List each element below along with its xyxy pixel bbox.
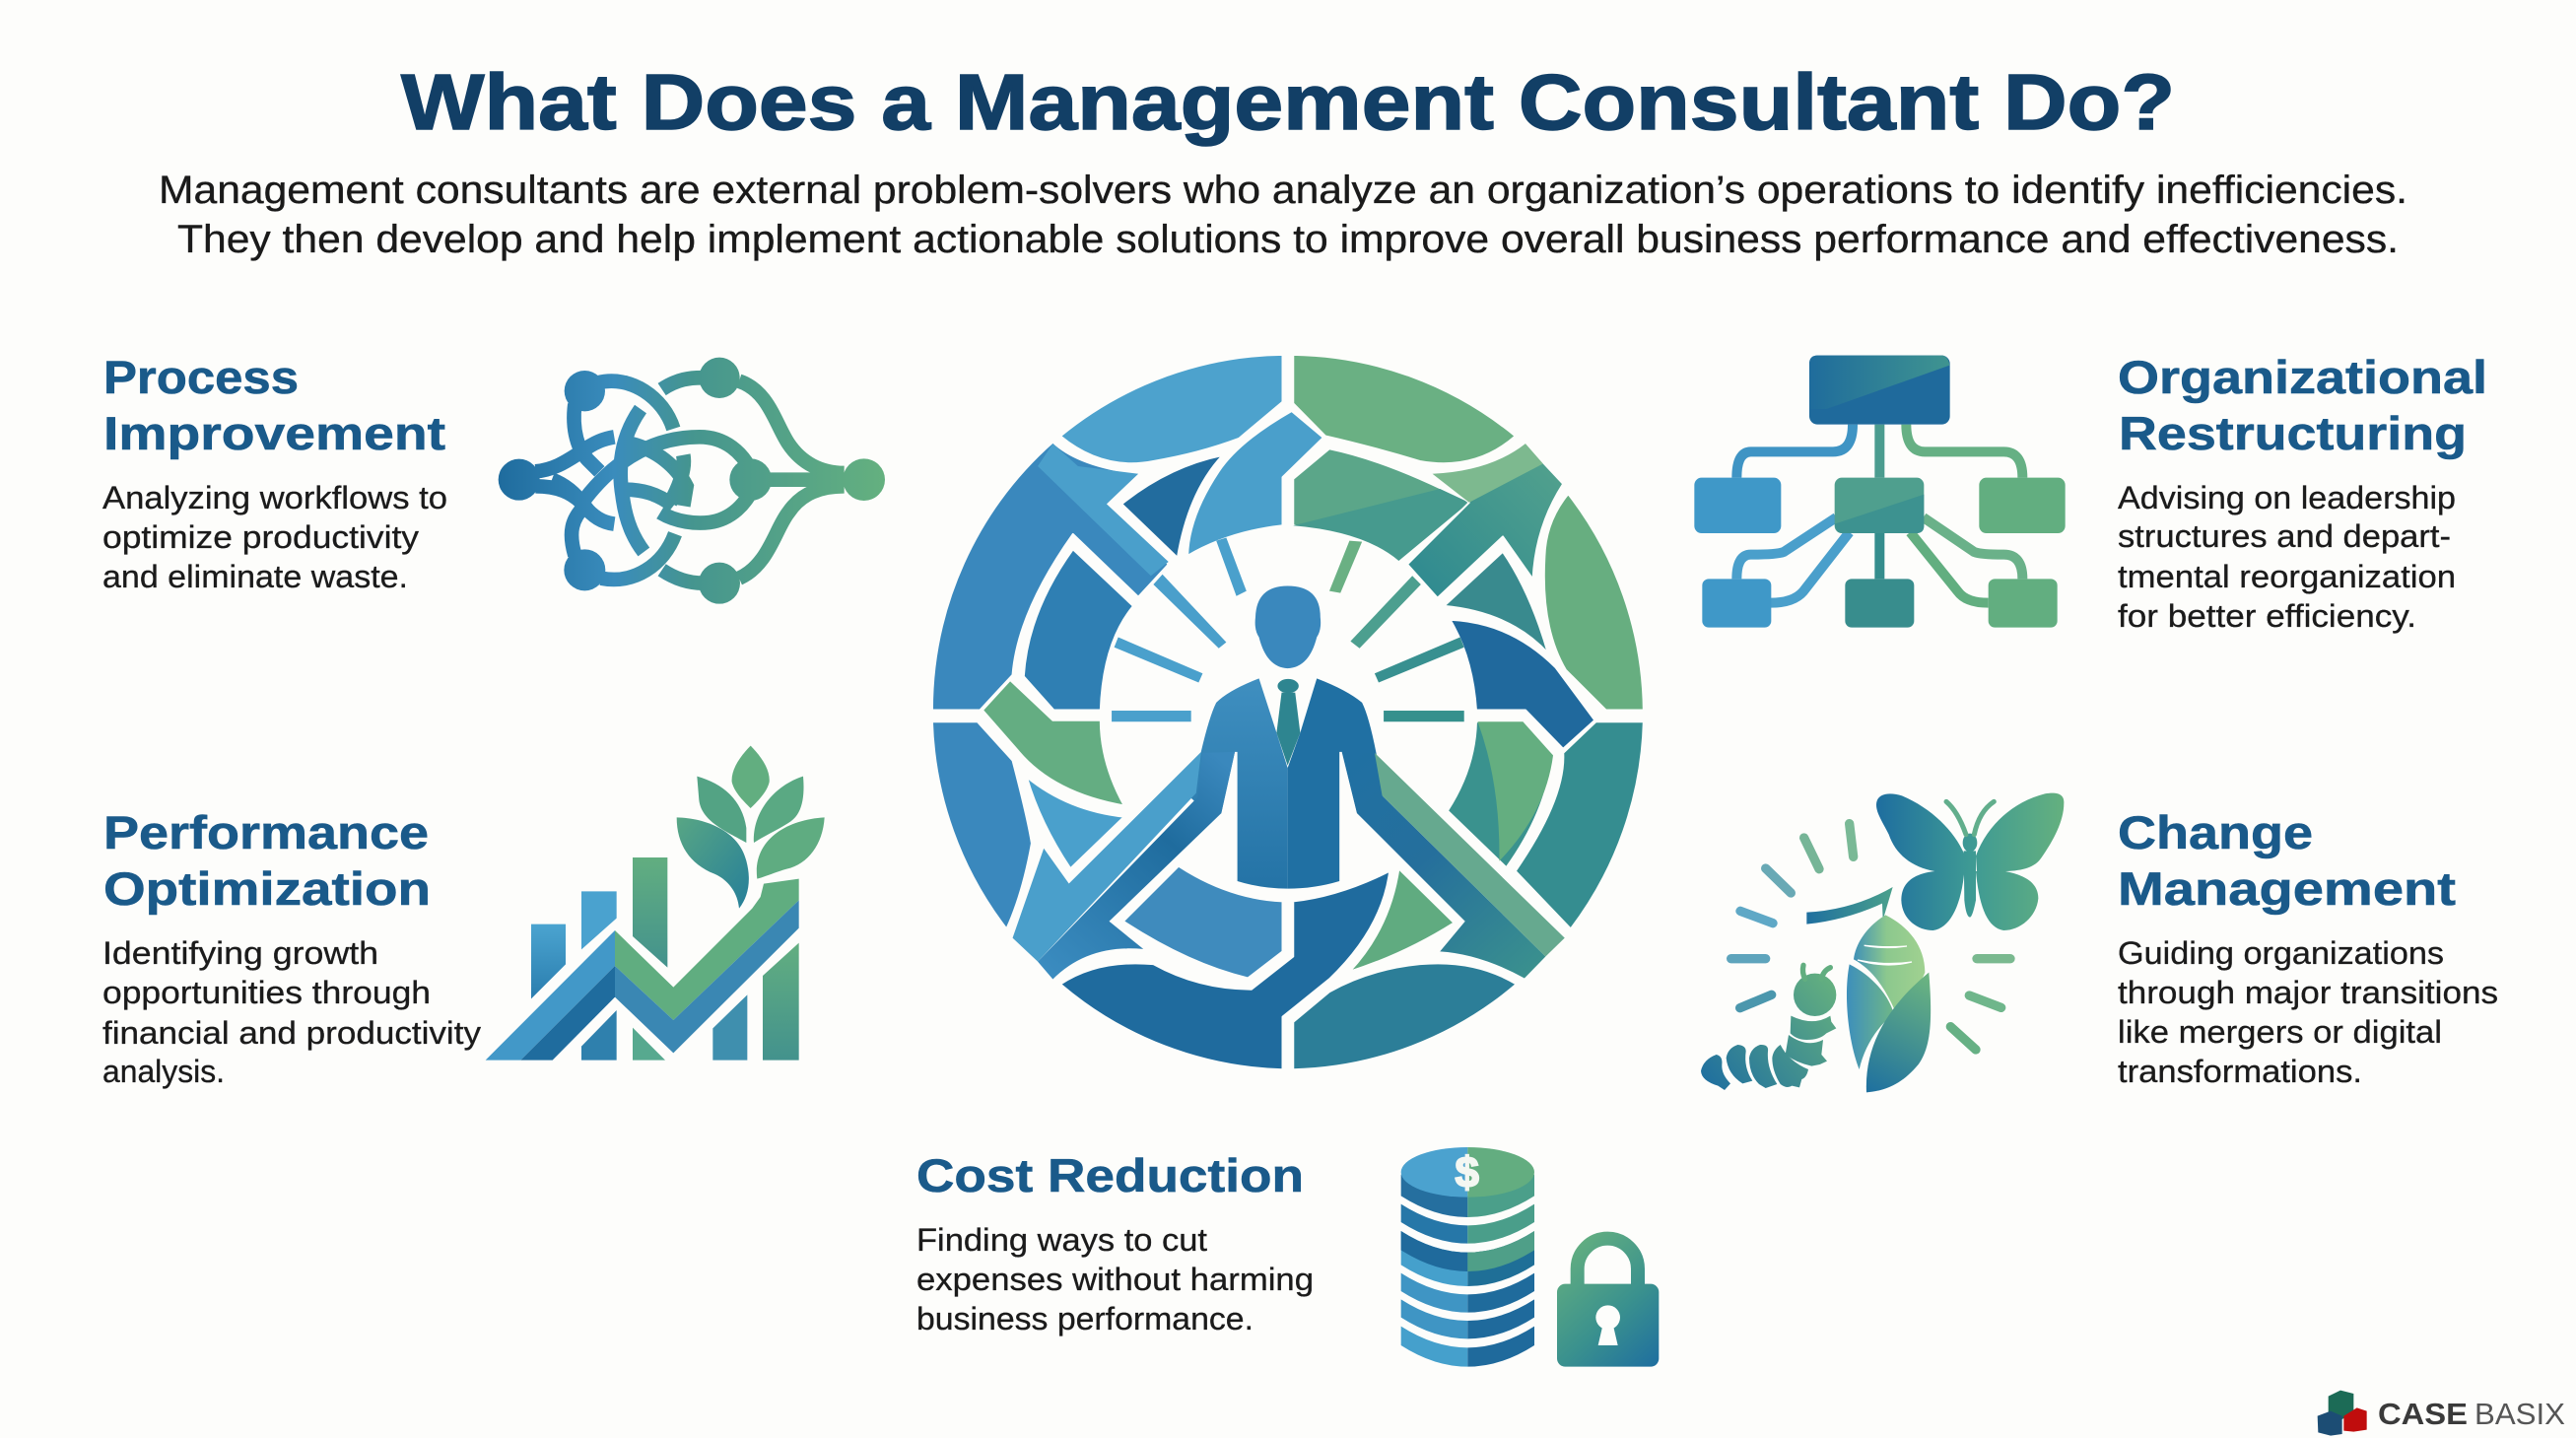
description: organizational restructuring: structures and depart-	[2118, 518, 2451, 554]
panel: cost reduction text	[916, 1149, 1314, 1336]
panel: change management text	[2118, 806, 2498, 1089]
title: What Does a Management Consultant Do?	[401, 58, 2175, 146]
panel: performance optimization text	[102, 806, 481, 1089]
intro text: Management consultants are external problem-solvers who analyze an organization’s operations to identify inefficiencies.	[159, 169, 2407, 212]
description: organizational restructuring: for better efficiency.	[2118, 598, 2416, 634]
butterfly	[1876, 793, 2064, 930]
icon: organization chart	[1694, 356, 2066, 628]
logo cubes	[2318, 1391, 2367, 1436]
description: performance optimization: analysis.	[102, 1054, 225, 1089]
padlock	[1557, 1239, 1659, 1367]
logo: casebasix	[2318, 1391, 2565, 1436]
coin stack: $	[1456, 1149, 1479, 1197]
heading: organizational restructuring: Restructuring	[2119, 407, 2467, 459]
panel: process improvement text	[102, 351, 447, 594]
heading: performance optimization	[103, 806, 431, 915]
description: cost reduction	[916, 1222, 1314, 1336]
radiating rays	[1112, 538, 1464, 721]
logo wordmark: BASIX	[2474, 1397, 2565, 1431]
description: performance optimization	[102, 935, 481, 1089]
description: process improvement: optimize productivity	[102, 519, 419, 555]
description: performance optimization: opportunities through	[102, 975, 431, 1010]
panel: organizational restructuring text	[2118, 351, 2487, 634]
description: organizational restructuring: Advising on leadership	[2118, 480, 2456, 515]
logo wordmark	[2378, 1397, 2565, 1431]
coin stack	[1401, 1147, 1534, 1367]
heading: process improvement	[103, 351, 445, 459]
twig	[1806, 887, 1893, 924]
heading: cost reduction: Cost Reduction	[916, 1149, 1304, 1201]
lower-right arm band	[1342, 752, 1565, 978]
transformation rays	[1731, 824, 2010, 1050]
consultant figure	[1191, 585, 1385, 889]
heading: process improvement: Improvement	[103, 407, 445, 459]
logo wordmark: CASE	[2378, 1397, 2468, 1431]
description: performance optimization: financial and productivity	[102, 1015, 481, 1051]
description: change management	[2118, 935, 2498, 1089]
heading: process improvement: Process	[103, 351, 299, 403]
description: cost reduction: Finding ways to cut	[916, 1222, 1207, 1258]
description: performance optimization: Identifying growth	[102, 935, 378, 971]
icon: caterpillar, chrysalis and butterfly	[1701, 793, 2064, 1092]
lower-left arm band	[1013, 752, 1235, 979]
description: organizational restructuring	[2118, 480, 2456, 634]
heading: change management: Management	[2118, 862, 2456, 915]
description: process improvement: Analyzing workflows to	[102, 480, 447, 515]
description: cost reduction: business performance.	[916, 1301, 1254, 1336]
heading: change management: Change	[2118, 806, 2313, 858]
description: change management: Guiding organizations	[2118, 935, 2444, 971]
heading: performance optimization: Optimization	[103, 862, 431, 915]
heading: performance optimization: Performance	[103, 806, 429, 858]
icon: coin stack and padlock	[1401, 1147, 1659, 1367]
description: process improvement	[102, 480, 447, 594]
description: process improvement: and eliminate waste.	[102, 559, 408, 594]
description: organizational restructuring: tmental reorganization	[2118, 559, 2456, 594]
chrysalis	[1847, 915, 1931, 1092]
central graphic: consultant in segmented circle	[932, 355, 1644, 1069]
description: change management: like mergers or digital	[2118, 1014, 2442, 1050]
intro text	[159, 169, 2407, 261]
heading: organizational restructuring: Organizational	[2118, 351, 2487, 403]
intro text: They then develop and help implement actionable solutions to improve overall business performance and effectiveness.	[177, 218, 2399, 261]
icon: growth chart with leaves	[486, 746, 825, 1061]
segmented ring	[932, 355, 1644, 1069]
heading: change management	[2118, 806, 2456, 915]
icon: process knot network	[499, 358, 885, 604]
caterpillar	[1701, 965, 1836, 1090]
description: change management: transformations.	[2118, 1054, 2362, 1089]
heading: organizational restructuring	[2118, 351, 2487, 459]
description: cost reduction: expenses without harming	[916, 1262, 1314, 1297]
description: change management: through major transitions	[2118, 975, 2498, 1010]
